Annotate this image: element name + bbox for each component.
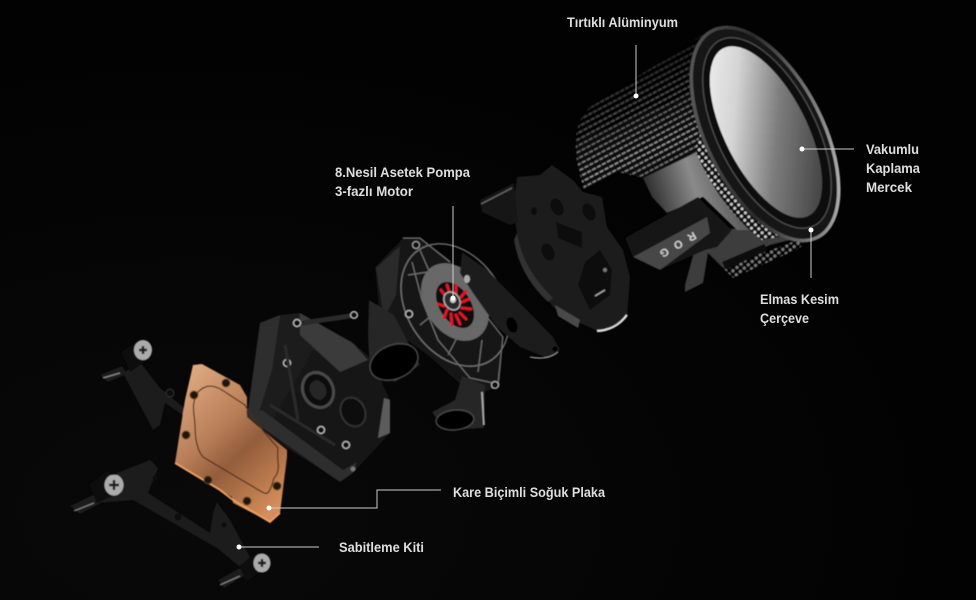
label: knurled aluminium: Tırtıklı Alüminyum bbox=[567, 14, 678, 30]
copper cold plate bbox=[175, 364, 287, 522]
lower mounting bracket bbox=[70, 460, 270, 588]
metal arm bbox=[643, 152, 760, 230]
ROG nameplate bbox=[625, 197, 732, 270]
pump motor assembly bbox=[364, 224, 531, 432]
label: pump motor bbox=[335, 164, 470, 300]
label: vacuum coated lens: Kaplama bbox=[866, 160, 920, 176]
vacuum coated lens bbox=[687, 30, 845, 234]
label: cold plate bbox=[266, 484, 605, 510]
label: vacuum coated lens: Mercek bbox=[866, 179, 912, 195]
wire frame bbox=[379, 224, 531, 386]
illustration: exploded pump assembly bbox=[70, 4, 869, 588]
pump block housing bbox=[247, 312, 390, 482]
rotor mount plate bbox=[480, 165, 630, 332]
label: vacuum coated lens: Vakumlu bbox=[866, 141, 919, 157]
upper mounting bracket bbox=[100, 340, 184, 430]
lens cap bbox=[575, 25, 842, 292]
knurled ring dots bbox=[695, 120, 782, 240]
label: pump motor: 8.Nesil Asetek Pompa bbox=[335, 164, 470, 180]
motor disc bbox=[407, 250, 503, 354]
label: vacuum coated lens bbox=[800, 141, 920, 195]
label: diamond cut bezel: Elmas Kesim bbox=[760, 291, 839, 307]
label: mounting kit bbox=[236, 539, 424, 555]
label: cold plate: Kare Biçimli Soğuk Plaka bbox=[453, 484, 605, 500]
outlet tube lower bbox=[432, 376, 485, 430]
outlet tube upper bbox=[368, 300, 420, 382]
diamond-cut rim bbox=[661, 4, 869, 264]
label: mounting kit: Sabitleme Kiti bbox=[339, 539, 424, 555]
label: pump motor: 3-fazlı Motor bbox=[335, 183, 414, 199]
pump body bbox=[375, 238, 503, 393]
red motor bbox=[428, 275, 482, 335]
ROG nameplate: ROG bbox=[657, 229, 698, 259]
curved arc plate bbox=[460, 252, 560, 358]
foot bracket bbox=[685, 228, 790, 292]
knurled cylinder bbox=[575, 34, 704, 190]
label: diamond cut bezel bbox=[760, 228, 839, 326]
label: diamond cut bezel: Çerçeve bbox=[760, 310, 809, 326]
label: knurled aluminium bbox=[567, 14, 678, 98]
